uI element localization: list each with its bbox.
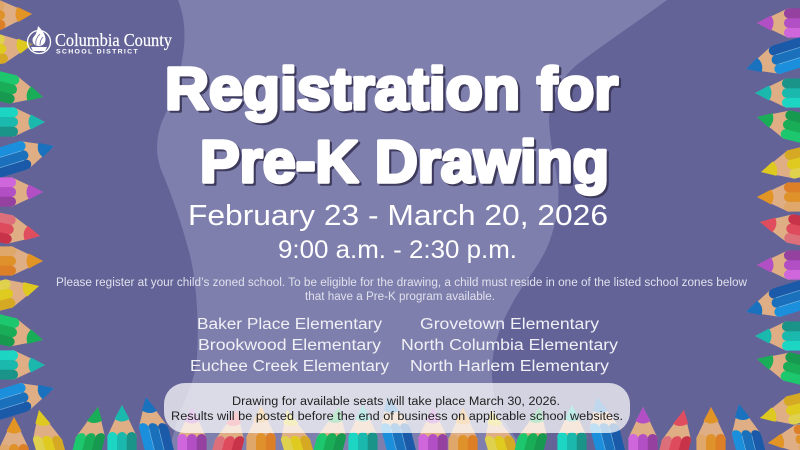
pencil: red	[757, 208, 800, 257]
pencil: blue	[373, 397, 416, 450]
school list: Euchee Creek Elementary	[190, 358, 389, 375]
light wavy background shape	[157, 0, 667, 450]
pencil: blue	[131, 397, 174, 450]
pencil: blue	[0, 374, 58, 431]
pencil: purple	[757, 250, 800, 280]
pencil: purple	[418, 407, 448, 450]
school list: North Harlem Elementary	[410, 358, 609, 375]
pencil: teal	[755, 321, 800, 351]
pencil: teal	[107, 405, 137, 450]
pencil: green	[753, 103, 800, 155]
pencil: teal	[348, 405, 378, 450]
pencil: yellow	[0, 272, 43, 324]
pencil: orange	[0, 417, 29, 450]
pencil: teal	[0, 350, 45, 380]
pencil: teal	[755, 78, 800, 108]
right pencils	[742, 8, 800, 450]
callout: drawing date: Drawing for available seats will take place March 30, 2026.	[232, 396, 560, 408]
pencil: yellow	[24, 410, 65, 450]
pencil: yellow	[0, 30, 35, 74]
callout: drawing date	[164, 383, 630, 433]
pencil: orange	[0, 246, 43, 276]
title line: Pre-K Drawing: Pre-K Drawing	[200, 129, 609, 195]
title line: Registration for: Registration for	[167, 58, 620, 124]
title line: Registration for: Registration for	[165, 56, 618, 122]
school list	[190, 316, 618, 375]
school list: Grovetown Elementary	[420, 316, 599, 333]
title	[165, 56, 620, 197]
pencil: teal	[557, 405, 587, 450]
logo wordmark: Columbia County	[55, 30, 172, 50]
pencil: green	[0, 59, 47, 111]
pencil: teal	[0, 107, 45, 137]
pencil: green	[515, 407, 555, 450]
icon: torch	[28, 26, 50, 54]
time range: 9:00 a.m. - 2:30 p.m.	[278, 236, 517, 264]
pencil: green	[753, 345, 800, 397]
logo: Columbia County School District	[28, 26, 172, 56]
left pencils	[0, 0, 58, 431]
pencil: green	[0, 302, 47, 354]
bottom pencils	[0, 397, 765, 450]
pencil: purple	[628, 407, 658, 450]
school list: Baker Place Elementary	[197, 316, 382, 333]
pencil: blue	[742, 26, 800, 83]
date range: February 23 - March 20, 2026	[188, 200, 608, 232]
pencil: yellow	[476, 410, 517, 450]
pencil: purple	[177, 407, 207, 450]
pencil: orange	[757, 182, 800, 212]
eligibility note: that have a Pre-K program available.	[305, 291, 495, 303]
pencil: orange	[448, 408, 478, 450]
logo subtitle: SCHOOL DISTRICT	[56, 48, 139, 56]
pencil: yellow	[756, 380, 800, 432]
pencil: orange	[696, 407, 726, 450]
title line: Pre-K Drawing: Pre-K Drawing	[202, 131, 611, 197]
pencil: blue	[724, 404, 765, 450]
school list: North Columbia Elementary	[401, 337, 618, 354]
pencil: green	[73, 407, 113, 450]
pencil: red	[659, 410, 699, 450]
eligibility note	[56, 277, 748, 303]
pencil: purple	[0, 177, 43, 207]
pencil: orange, cut by the corner	[768, 424, 800, 450]
school list: Brookwood Elementary	[198, 337, 381, 354]
pencil: blue	[742, 269, 800, 326]
pencil: red	[212, 410, 252, 450]
eligibility note: Please register at your child’s zoned school. To be eligible for the drawing, a child must reside in one of the listed school zones below	[56, 277, 748, 289]
pencil: red	[0, 201, 43, 250]
callout: drawing date: Results will be posted before the end of business on applicable school websites.	[171, 411, 623, 423]
pencil: yellow	[757, 134, 800, 186]
pencil: orange	[0, 0, 33, 32]
pencil: green	[314, 407, 354, 450]
pencil: purple	[757, 8, 800, 38]
pencil: yellow	[272, 410, 313, 450]
pencil: blue	[582, 397, 625, 450]
pencil: orange	[246, 406, 276, 450]
pencil: blue	[0, 132, 58, 189]
